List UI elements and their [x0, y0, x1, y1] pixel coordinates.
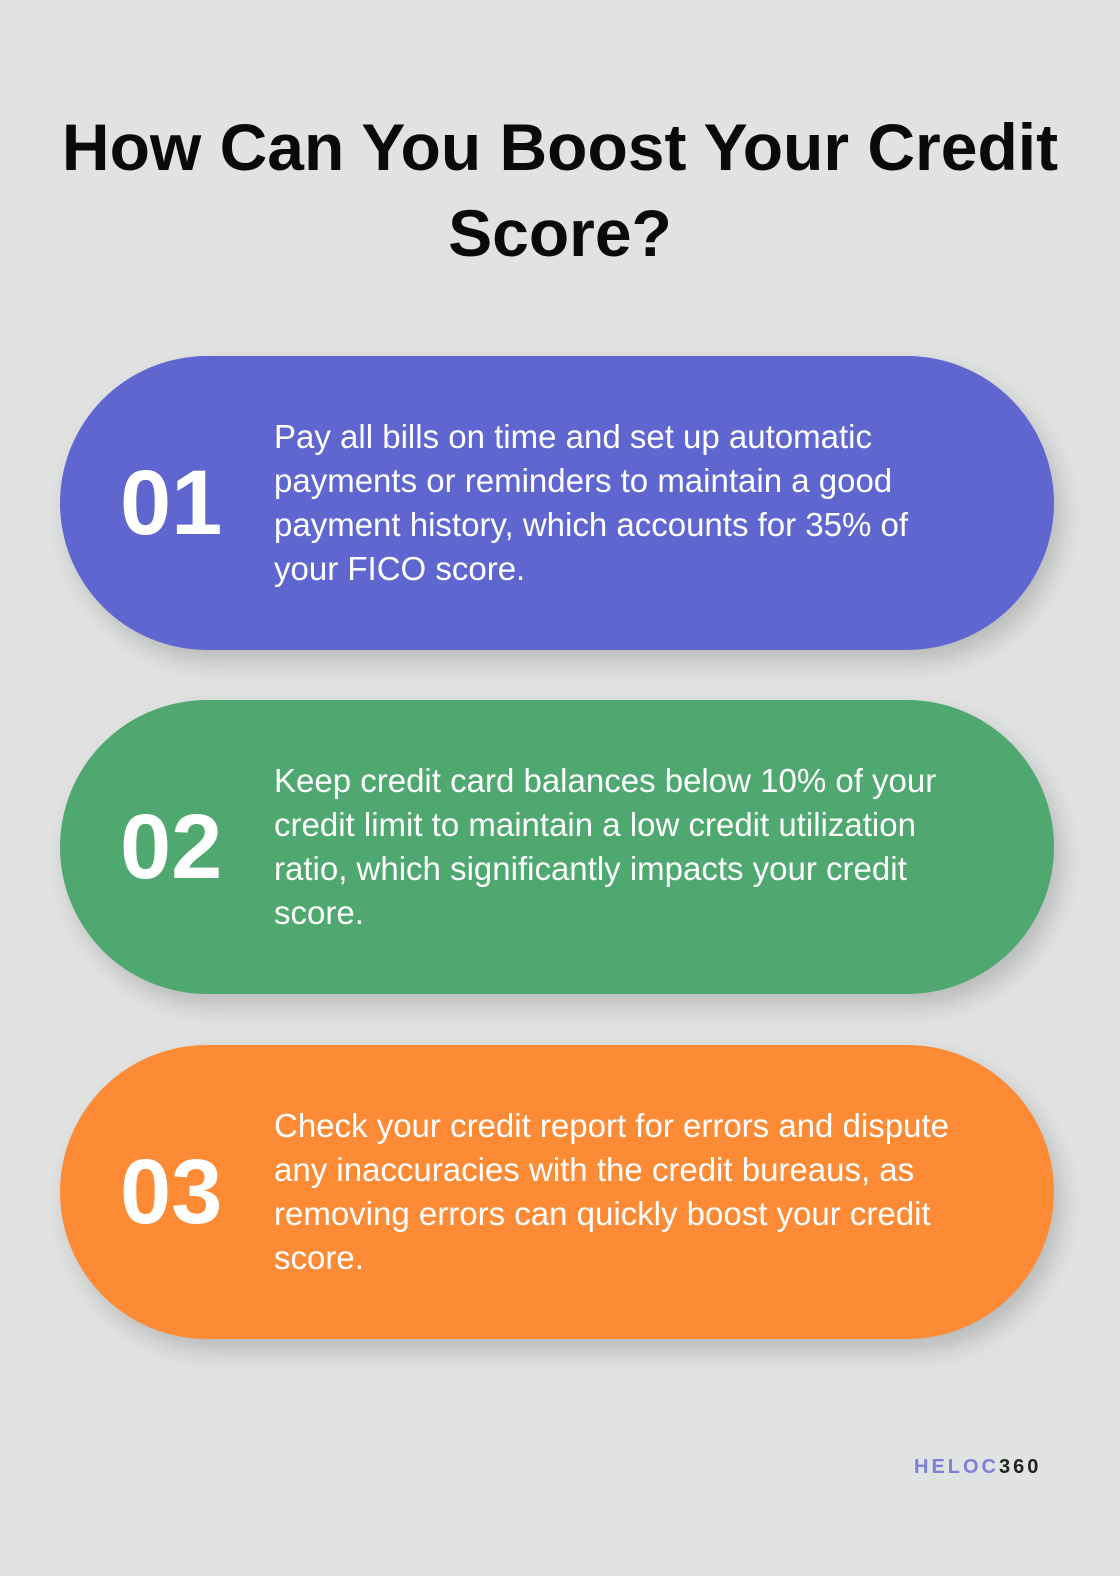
text 02: score. — [274, 894, 364, 931]
text 01 — [274, 418, 908, 587]
title — [62, 110, 1058, 270]
text 02: ratio, which significantly impacts your credit — [274, 850, 907, 887]
number 02: 02 — [120, 796, 222, 898]
text 03: Check your credit report for errors and dispute — [274, 1107, 949, 1144]
text 03: score. — [274, 1239, 364, 1276]
number 03: 03 — [120, 1141, 222, 1243]
text 01: your FICO score. — [274, 550, 525, 587]
number 01: 01 — [120, 452, 222, 554]
text 01: payment history, which accounts for 35% of — [274, 506, 908, 543]
text 03: removing errors can quickly boost your credit — [274, 1195, 931, 1232]
text 03 — [274, 1107, 949, 1276]
panel: step 01 — [60, 356, 1054, 650]
text 02: Keep credit card balances below 10% of your — [274, 762, 936, 799]
panel: step 03 — [60, 1045, 1054, 1339]
text 01: payments or reminders to maintain a good — [274, 462, 892, 499]
logo: HELOC360 — [914, 1456, 1041, 1478]
text 03: any inaccuracies with the credit bureaus, as — [274, 1151, 914, 1188]
title: How Can You Boost Your Credit — [62, 110, 1058, 184]
text 02: credit limit to maintain a low credit utilization — [274, 806, 916, 843]
title: Score? — [448, 196, 672, 270]
text 02 — [274, 762, 936, 931]
text 01: Pay all bills on time and set up automatic — [274, 418, 872, 455]
panel: step 02 — [60, 700, 1054, 994]
